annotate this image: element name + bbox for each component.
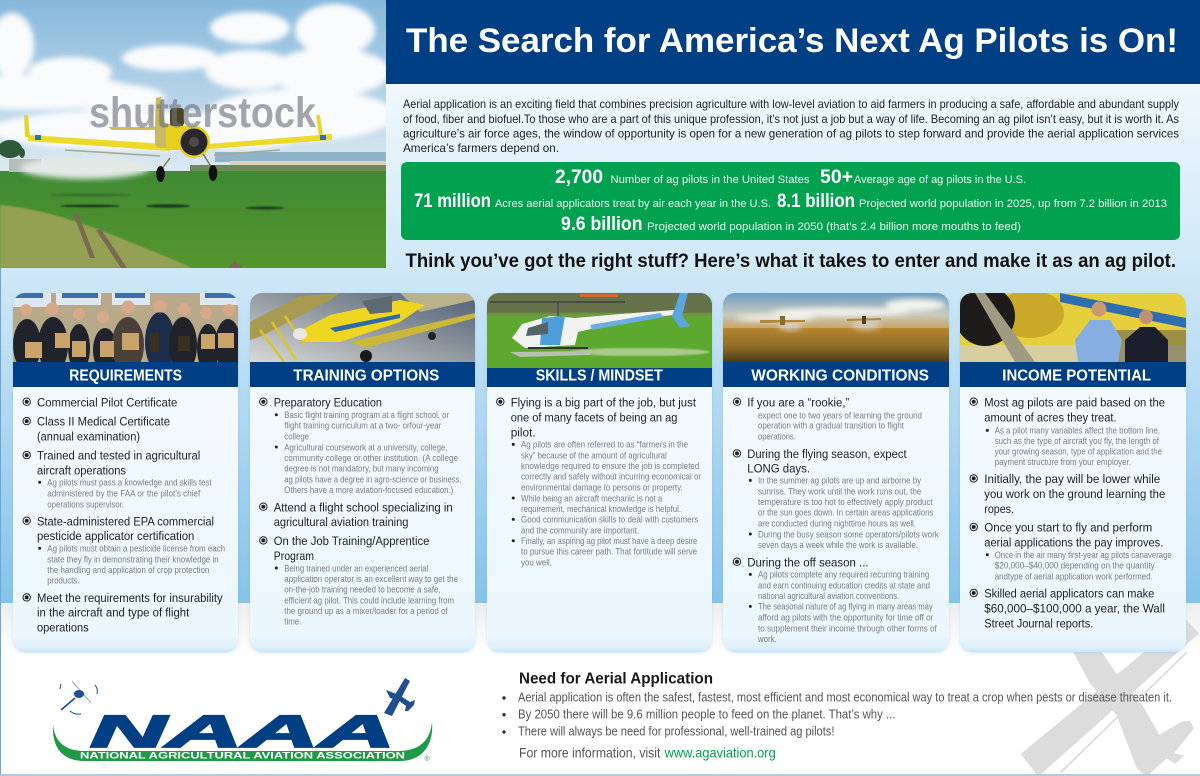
need for aerial application text block: By 2050 there will be 9.6 million people to feed on the planet. That’s why ... [518,707,896,721]
statistics panel: Acres aerial applicators treat by air each year in the U.S. [495,198,771,210]
heading band: working conditions [723,362,949,387]
heading band: income potential: INCOME POTENTIAL [1002,368,1151,385]
statistics panel: Average age of ag pilots in the U.S. [854,174,1026,186]
list: training options: on-the-job training needed to become a safe, [284,585,441,595]
list: requirements: the handling and application of crop protection [47,565,209,575]
list: income potential: Skilled aerial applicators can make [984,587,1154,601]
statistics panel: Projected world population in 2050 (that’s 2.4 billion more mouths to feed) [647,221,1021,233]
panel: income potential [955,286,1186,652]
list: requirements: Commercial Pilot Certificate [37,395,177,409]
statistics panel [401,162,1180,240]
list: skills and mindset: pilot. [511,425,536,439]
list: working conditions: temperature is too hot to effectively apply product [758,497,933,507]
list: requirements [23,395,225,634]
NAAA logo: ® [424,755,430,763]
need for aerial application text block [502,670,1172,760]
heading band: working conditions: WORKING CONDITIONS [751,368,929,385]
list: working conditions: operation with a gradual transition to flight [758,421,904,431]
statistics panel: Projected world population in 2025, up from 7.2 billion in 2013 [859,198,1167,210]
list: requirements: Trained and tested in agricultural [37,449,200,463]
list: income potential: Once in the air many first-year ag pilots canaverage [995,550,1172,560]
list: working conditions: During the off season ... [747,555,869,569]
intro paragraph [403,97,1179,155]
list: skills and mindset: Finally, an aspiring ag pilot must have a deep desire [521,536,697,546]
list: working conditions: afford ag pilots with the opportunity for time off or [758,613,933,623]
photo: two pilots beside a yellow aircraft [960,293,1186,362]
heading band: income potential [960,362,1186,387]
list: skills and mindset: one of many facets of being an ag [511,411,677,425]
panel: working conditions [723,293,949,652]
list: skills and mindset: Flying is a big part of the job, but just [511,395,697,409]
intro paragraph: agriculture’s air force ages, the window of opportunity is open for a new generation of ag pilots to step forward and provide the aerial application services [403,126,1179,140]
NAAA logo: NAAA [90,706,395,757]
NAAA logo [53,678,432,763]
list: working conditions: national agricultural aviation conventions. [758,591,899,601]
list: working conditions: During the flying season, expect [747,447,907,461]
list: working conditions: to supplement their income through other forms of [758,623,937,633]
list: income potential: aerial applications the pay improves. [984,536,1163,550]
title banner: The Search for America’s Next Ag Pilots is On! [406,22,1178,60]
heading band: skills and mindset [487,368,712,387]
list: requirements: Class II Medical Certificate [37,415,170,429]
list: working conditions: seven days a week while the work is available. [758,540,918,550]
background airplane silhouette [1021,618,1199,776]
list: income potential: Initially, the pay will be lower while [984,472,1160,486]
list: skills and mindset: and the community are important. [521,525,639,535]
list: training options: Others have a more aviation-focused education.) [284,485,453,495]
statistics panel: 50+ [820,167,853,188]
list: working conditions: are conducted during nighttime hours as well. [758,519,916,529]
list: income potential: Street Journal reports. [984,616,1093,630]
list: training options: Attend a flight school specializing in [274,500,453,514]
list: income potential: andtype of aerial application work performed. [995,571,1153,581]
need for aerial application text block: There will always be need for professional, well-trained ag pilots! [518,725,834,739]
list: requirements: (annual examination) [37,429,140,443]
list: requirements: Ag pilots must obtain a pesticide license from each [47,544,225,554]
list: working conditions: In the summer ag pilots are up and airborne by [758,476,921,486]
list: income potential: such as the type of aircraft you fly, the length of [995,436,1159,446]
list: income potential: Once you start to fly and perform [984,521,1152,535]
list: income potential: ropes. [984,502,1014,516]
list: skills and mindset: Good communication skills to deal with customers [521,515,699,525]
list: training options [260,395,462,627]
list: skills and mindset: knowledge required to ensure the job is completed [521,461,699,471]
list: income potential: Most ag pilots are paid based on the [984,395,1165,409]
list: requirements: products. [47,576,79,586]
statistics panel: 2,700 [555,167,603,188]
list: requirements: Ag pilots must pass a knowledge and skills test [47,478,212,488]
photo: award recipients [13,293,238,362]
list: requirements: administered by the FAA or the pilot’s chief [47,489,201,499]
list: requirements: State-administered EPA commercial [37,514,214,528]
list: training options: flight training curriculum at a two- orfour-year [284,421,441,431]
airplane in hero photo [24,97,332,182]
list: working conditions: If you are a “rookie,” [747,395,849,409]
list: skills and mindset: While being an aircraft mechanic is not a [521,493,663,503]
list: training options: application operator is an excellent way to get the [284,574,458,584]
list: requirements: operations supervisor. [47,499,124,509]
list: skills and mindset: sky” because of the amount of agricultural [521,450,667,460]
list: requirements: state they fly in demonstrating their knowledge in [47,554,219,564]
green swoosh [53,722,432,761]
list: income potential [970,395,1172,630]
list: training options: Basic flight training program at a flight school, or [284,410,449,420]
list: training options: efficient ag pilot. This could include learning from [284,595,454,605]
list: income potential: payment structure from your employer. [995,457,1131,467]
list: skills and mindset: requirement, mechanical knowledge is helpful. [521,504,681,514]
list: training options: Being trained under an experienced aerial [284,563,428,573]
list: skills and mindset: correctly and safely without incurring economical or [521,472,701,482]
list: income potential: $20,000–$40,000 depending on the quantity [995,561,1155,571]
heading band: skills and mindset: SKILLS / MINDSET [536,368,663,385]
photo: yellow biplane [250,293,475,362]
intro paragraph: America’s farmers depend on. [403,141,559,155]
heading band: requirements [13,362,238,387]
list: training options: degree is not mandatory, but many incoming [284,464,439,474]
panel: skills and mindset [487,293,712,652]
need for aerial application text block: www.agaviation.org [664,744,776,760]
heading band: requirements: REQUIREMENTS [69,368,182,385]
list: working conditions: LONG days. [747,461,810,475]
list: working conditions: During the busy season some operators/pilots work [758,529,939,539]
list: income potential: $60,000–$100,000 a year, the Wall [984,602,1165,616]
list: working conditions: expect one to two years of learning the ground [758,410,922,420]
list: training options: On the Job Training/Apprentice [274,534,429,548]
list: requirements: aircraft operations [37,463,126,477]
panel: requirements [13,293,241,652]
list: working conditions: sunrise. They work until the work runs out, the [758,486,921,496]
list: income potential: amount of acres they treat. [984,411,1117,425]
list: training options: community college or other institution. (A college [284,453,458,463]
list: requirements: pesticide applicator certification [37,529,194,543]
list: working conditions: and earn continuing education credits at state and [758,580,930,590]
list: training options: agricultural aviation training [274,515,408,529]
icon: airplane [384,678,415,716]
statistics panel: 71 million [414,191,491,212]
list: requirements: in the aircraft and type of flight [37,606,190,620]
list: training options: ag pilots have a degree in agro-science or business. [284,474,462,484]
heading band: training options [250,362,475,387]
list: training options: Program [274,549,314,563]
list: training options: Agricultural coursework at a university, college, [284,442,448,452]
photo: two planes over a crop field [723,293,949,362]
panel: training options [250,293,475,652]
list: working conditions: operations. [758,431,796,441]
list: working conditions [733,395,939,644]
list: working conditions: work. [757,634,777,644]
list: skills and mindset: Ag pilots are often referred to as “farmers in the [521,440,688,450]
list: training options: college [284,432,309,442]
list: working conditions: or the sun goes down. In certain areas applications [758,508,934,518]
shutterstock watermark: shutterstock [89,89,316,137]
photo: spray helicopter [487,293,712,368]
list: skills and mindset [497,395,701,568]
statistics panel: 8.1 billion [777,191,855,212]
heading band: training options: TRAINING OPTIONS [293,368,440,385]
list: skills and mindset: environmental damage to persons or property. [521,482,683,492]
list: working conditions: The seasonal nature of ag flying in many areas may [758,602,933,612]
list: requirements: operations [37,620,89,634]
need for aerial application text block: For more information, visit [519,744,660,760]
list: working conditions: Ag pilots complete any required recurring training [758,570,929,580]
list: income potential: your growing season, type of application and the [995,446,1162,456]
list: training options: the ground up as a mixer/loader for a period of [284,606,448,616]
list: income potential: As a pilot many variables affect the bottom line, [995,426,1160,436]
NAAA logo: NATIONAL AGRICULTURAL AVIATION ASSOCIATION [80,751,405,762]
small planes [760,316,881,325]
list: skills and mindset: to pursue this career path. That fortitude will serve [521,547,697,557]
title banner [386,0,1200,84]
list: requirements: Meet the requirements for insurability [37,591,223,605]
list: training options: time. [284,617,301,627]
statistics panel: Number of ag pilots in the United States [610,174,810,186]
list: training options: Preparatory Education [274,395,382,409]
need for aerial application text block: Need for Aerial Application [519,670,713,687]
hero photo: crop duster over a field [0,0,395,268]
list: income potential: you work on the ground learning the [984,487,1165,501]
icon: helicopter [60,681,97,714]
list: skills and mindset: you well. [521,558,552,568]
statistics panel: 9.6 billion [561,214,642,235]
call to action heading: Think you’ve got the right stuff? Here’s what it takes to enter and make it as an ag pilot. [406,251,1176,272]
